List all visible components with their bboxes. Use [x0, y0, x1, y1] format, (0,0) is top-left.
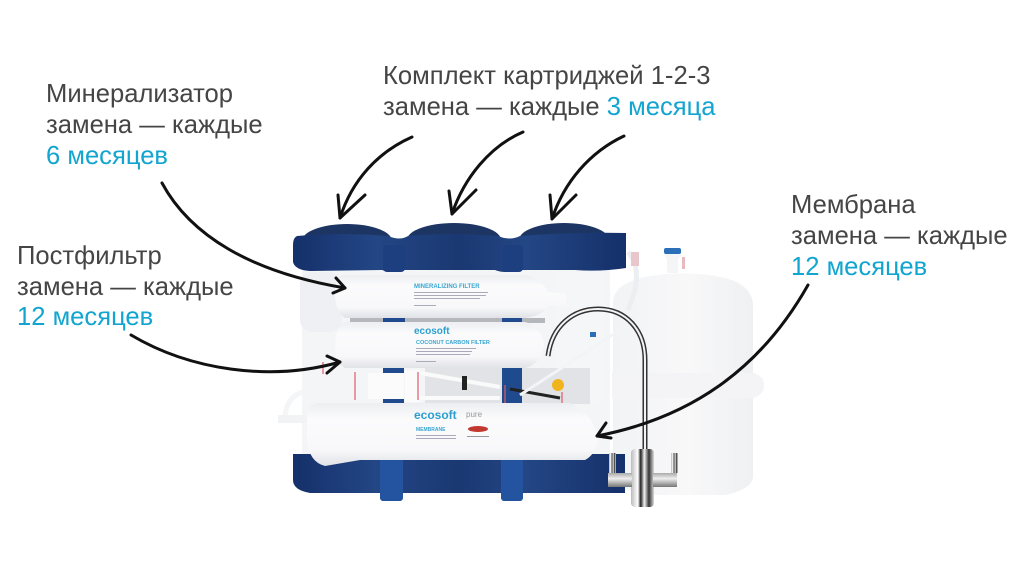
storage tank	[612, 248, 764, 495]
filter unit frame	[300, 270, 610, 460]
label: мембрана: замена — каждые	[791, 222, 1008, 250]
label: минерализатор: замена — каждые	[46, 111, 263, 139]
label: минерализатор: Минерализатор	[46, 80, 233, 108]
cartridge: coconut carbon: COCONUT CARBON FILTER	[416, 340, 490, 346]
arrow: картридж 1	[338, 137, 412, 218]
label: постфильтр: замена — каждые	[17, 273, 234, 301]
bottom blue base	[293, 454, 625, 501]
arrow: картридж 2	[449, 132, 523, 214]
arrow: мембрана	[597, 285, 808, 438]
arrow: картридж 3	[550, 136, 624, 219]
cartridge: coconut carbon: ecosoft	[414, 326, 450, 337]
top blue cap with three domes	[293, 223, 626, 272]
cartridge: membrane: ecosoft	[414, 408, 457, 422]
cartridge: mineralizer	[335, 275, 566, 318]
cartridge: coconut carbon	[335, 322, 544, 368]
label: постфильтр: 12 месяцев	[17, 303, 153, 331]
cartridge: membrane: pure	[466, 410, 483, 419]
cartridge: membrane: MEMBRANE	[416, 427, 446, 433]
label: минерализатор: 6 месяцев	[46, 142, 168, 170]
label: постфильтр: Постфильтр	[17, 242, 162, 270]
chrome faucet	[548, 309, 678, 507]
tubing and fittings	[278, 252, 639, 423]
label: мембрана: 12 месяцев	[791, 253, 927, 281]
arrow: минерализатор	[162, 183, 345, 293]
label: мембрана: Мембрана	[791, 191, 916, 219]
cartridge: mineralizer: MINERALIZING FILTER	[414, 284, 480, 290]
arrow: постфильтр	[131, 335, 340, 373]
label: комплект картриджей: замена — каждые 3 месяца	[383, 93, 716, 121]
cartridge: membrane	[307, 403, 598, 466]
label: комплект картриджей: Комплект картриджей 1-2-3	[383, 62, 710, 90]
